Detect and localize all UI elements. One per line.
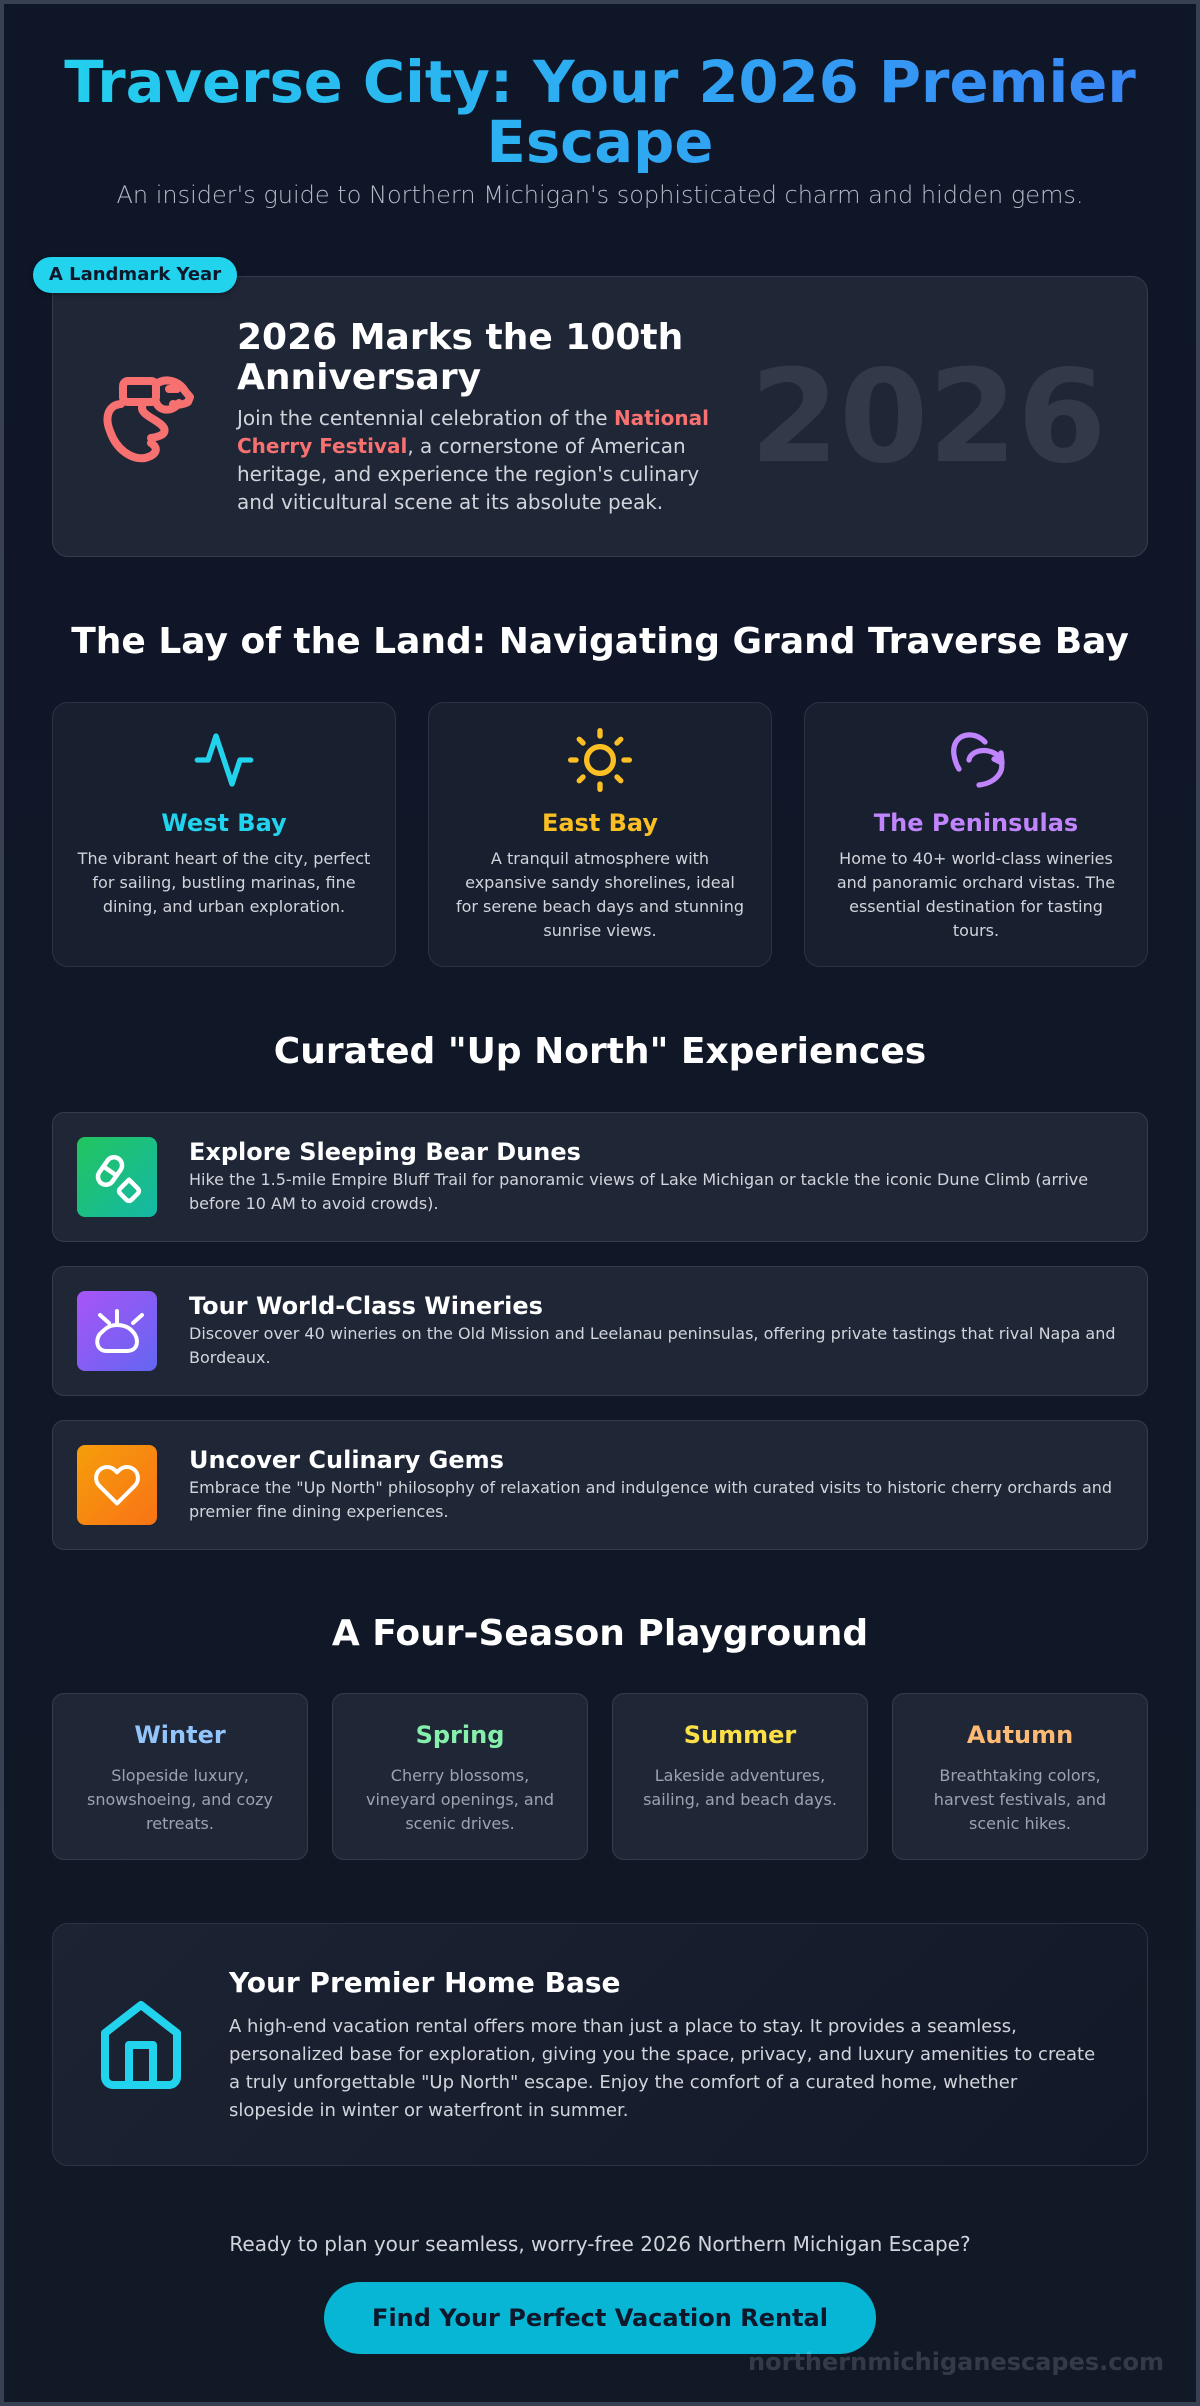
text: Sleeping Bear Dunes bbox=[189, 1170, 1088, 1212]
heading: The Peninsulas: The Peninsulas bbox=[874, 809, 1078, 837]
heading: anniversary: Anniversary bbox=[237, 357, 481, 398]
panel: West Bay bbox=[52, 702, 396, 967]
panel: Summer bbox=[612, 1693, 868, 1860]
button: Find Your Perfect Vacation Rental: Find Your Perfect Vacation Rental bbox=[372, 2304, 828, 2332]
text: home base bbox=[229, 2016, 1095, 2121]
text: home base: personalized base for exploration, giving you the space, privacy, and luxury amenities to create bbox=[229, 2044, 1095, 2065]
panel: Culinary Gems bbox=[52, 1420, 1148, 1550]
icon: dome bbox=[77, 1291, 157, 1371]
panel: home base bbox=[52, 1923, 1148, 2166]
text: Culinary Gems bbox=[189, 1478, 1112, 1520]
text: anniversary description: Join the centennial celebration of the National bbox=[237, 406, 709, 430]
panel: The Peninsulas bbox=[804, 702, 1148, 967]
heading: Wineries: Tour World-Class Wineries bbox=[189, 1292, 543, 1320]
text: Spring: scenic drives. bbox=[405, 1814, 515, 1833]
text: The Peninsulas: and panoramic orchard vistas. The bbox=[837, 873, 1115, 892]
text: Winter: retreats. bbox=[146, 1814, 214, 1833]
text: anniversary description: and viticultural scene at its absolute peak. bbox=[237, 490, 663, 514]
heading: East Bay: East Bay bbox=[542, 809, 658, 837]
text: home base: a truly unforgettable "Up North" escape. Enjoy the comfort of a curated home, whether bbox=[229, 2072, 1017, 2093]
text: Spring: vineyard openings, and bbox=[366, 1790, 554, 1809]
text: West Bay: dining, and urban exploration. bbox=[103, 897, 345, 916]
text: Summer: sailing, and beach days. bbox=[643, 1790, 837, 1809]
text: anniversary description: heritage, and experience the region's culinary bbox=[237, 462, 699, 486]
title bbox=[0, 53, 1200, 173]
panel: Spring bbox=[332, 1693, 588, 1860]
text: The Peninsulas bbox=[837, 849, 1115, 940]
icon: cherry bbox=[103, 376, 194, 462]
icon: home bbox=[101, 2000, 181, 2089]
text: Culinary Gems: premier fine dining experiences. bbox=[189, 1502, 449, 1520]
text: Culinary Gems: Embrace the "Up North" philosophy of relaxation and indulgence with curated visits to historic cherry orchards and bbox=[189, 1478, 1112, 1496]
panel: Sleeping Bear Dunes bbox=[52, 1112, 1148, 1242]
heading: Summer: Summer bbox=[684, 1721, 796, 1749]
icon: heart bbox=[77, 1445, 157, 1525]
pill: A Landmark Year: A Landmark Year bbox=[49, 264, 221, 285]
text: Autumn: scenic hikes. bbox=[969, 1814, 1071, 1833]
heading: anniversary: 2026 Marks the 100th bbox=[237, 317, 683, 358]
heading: Culinary Gems: Uncover Culinary Gems bbox=[189, 1446, 504, 1474]
text: East Bay: for serene beach days and stunning bbox=[456, 897, 744, 916]
text: Autumn bbox=[934, 1766, 1106, 1833]
heading: anniversary bbox=[237, 317, 683, 398]
panel: Winter bbox=[52, 1693, 308, 1860]
text: Summer bbox=[643, 1766, 837, 1809]
icon: peninsulas bbox=[951, 732, 1005, 788]
button: Find Your Perfect Vacation Rental bbox=[324, 2282, 876, 2354]
text: East Bay bbox=[456, 849, 744, 940]
text: Summer: Lakeside adventures, bbox=[655, 1766, 825, 1785]
panel: Autumn bbox=[892, 1693, 1148, 1860]
heading: Winter: Winter bbox=[134, 1721, 226, 1749]
title: Escape bbox=[487, 109, 713, 176]
watermark: 2026: 2026 bbox=[750, 343, 1106, 492]
text: anniversary description bbox=[236, 406, 709, 514]
heading: home base: Your Premier Home Base bbox=[229, 1966, 621, 1999]
heading: lay of the land: The Lay of the Land: Navigating Grand Traverse Bay bbox=[71, 621, 1129, 662]
text: anniversary description: Cherry Festival, a cornerstone of American bbox=[237, 434, 686, 458]
text: West Bay: The vibrant heart of the city, perfect bbox=[78, 849, 370, 868]
text: Winter: snowshoeing, and cozy bbox=[87, 1790, 273, 1809]
text: Spring: Cherry blossoms, bbox=[391, 1766, 529, 1785]
pill: A Landmark Year bbox=[33, 257, 237, 293]
text: Winter bbox=[87, 1766, 273, 1833]
text: Wineries: Discover over 40 wineries on the Old Mission and Leelanau peninsulas, offering private tastings that rival Napa and bbox=[189, 1324, 1116, 1342]
heading: Sleeping Bear Dunes: Explore Sleeping Bear Dunes bbox=[189, 1138, 581, 1166]
text: Autumn: Breathtaking colors, bbox=[939, 1766, 1101, 1785]
text: East Bay: expansive sandy shorelines, ideal bbox=[465, 873, 735, 892]
watermark: website: northernmichiganescapes.com bbox=[748, 2348, 1164, 2376]
icon: trail links bbox=[77, 1137, 157, 1217]
panel: Wineries bbox=[52, 1266, 1148, 1396]
text: Autumn: harvest festivals, and bbox=[934, 1790, 1106, 1809]
text: Spring bbox=[366, 1766, 554, 1833]
text: West Bay: for sailing, bustling marinas, fine bbox=[92, 873, 356, 892]
panel: anniversary bbox=[52, 276, 1148, 557]
heading: experiences: Curated "Up North" Experiences bbox=[274, 1031, 926, 1072]
text: East Bay: A tranquil atmosphere with bbox=[491, 849, 709, 868]
text: home base: slopeside in winter or waterfront in summer. bbox=[229, 2100, 628, 2121]
heading: Autumn: Autumn bbox=[967, 1721, 1073, 1749]
text: Sleeping Bear Dunes: Hike the 1.5-mile Empire Bluff Trail for panoramic views of Lake Michigan or tackle the iconic Dune Climb (arrive bbox=[189, 1170, 1088, 1188]
text: The Peninsulas: Home to 40+ world-class wineries bbox=[839, 849, 1113, 868]
title: Traverse City: Your 2026 Premier bbox=[64, 49, 1136, 116]
icon: sun bbox=[568, 728, 632, 792]
text: West Bay bbox=[78, 849, 370, 916]
text: The Peninsulas: essential destination for tasting bbox=[849, 897, 1103, 916]
text: Wineries: Bordeaux. bbox=[189, 1348, 271, 1366]
heading: West Bay: West Bay bbox=[161, 809, 287, 837]
text: The Peninsulas: tours. bbox=[953, 921, 999, 940]
icon: pulse bbox=[194, 733, 254, 787]
call to action text: Ready to plan your seamless, worry-free 2026 Northern Michigan Escape? bbox=[229, 2232, 971, 2256]
panel: East Bay bbox=[428, 702, 772, 967]
subtitle: An insider's guide to Northern Michigan's sophisticated charm and hidden gems. bbox=[116, 181, 1084, 209]
text: East Bay: sunrise views. bbox=[543, 921, 657, 940]
heading: Spring: Spring bbox=[416, 1721, 504, 1749]
text: Winter: Slopeside luxury, bbox=[111, 1766, 249, 1785]
heading: seasons: A Four-Season Playground bbox=[332, 1613, 868, 1654]
text: Sleeping Bear Dunes: before 10 AM to avoid crowds). bbox=[189, 1194, 438, 1212]
text: Wineries bbox=[189, 1324, 1116, 1366]
text: home base: A high-end vacation rental offers more than just a place to stay. It provides a seamless, bbox=[229, 2016, 1017, 2037]
